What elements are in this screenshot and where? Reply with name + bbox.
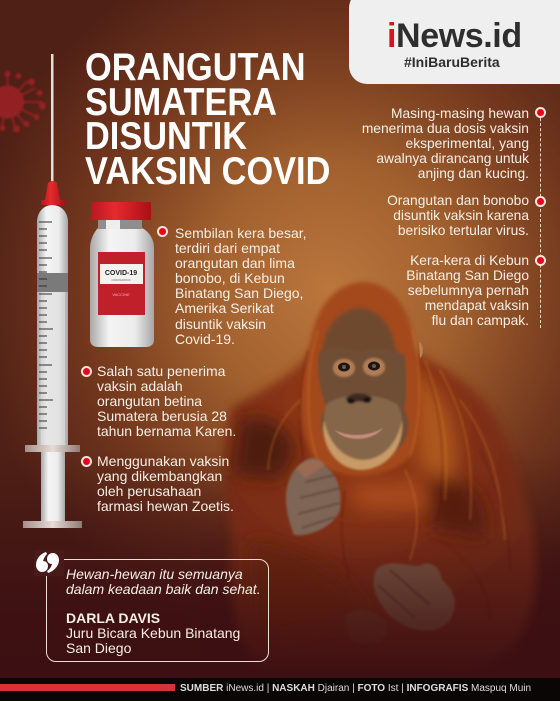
bullet marker 2 — [81, 366, 92, 377]
text: nine apes: Covid-19. — [175, 331, 235, 347]
text: risk: disuntik vaksin karena — [393, 208, 529, 223]
text: nine apes — [175, 225, 307, 347]
speaker: Juru Bicara Kebun Binatang — [66, 625, 240, 641]
text: flu: Binatang San Diego — [406, 268, 529, 283]
quote box — [46, 559, 269, 662]
tagline: #IniBaruBerita — [404, 54, 500, 70]
shaded fur masses — [232, 370, 486, 640]
text: Karen: Sumatera berusia 28 — [97, 408, 227, 424]
bullet marker 4 — [535, 107, 546, 118]
text: risk: Orangutan dan bonobo — [387, 193, 529, 208]
bullet marker 3 — [81, 456, 92, 467]
text: Zoetis: farmasi hewan Zoetis. — [97, 498, 234, 514]
text: two doses — [362, 106, 529, 181]
text: two doses: awalnya dirancang untuk — [376, 151, 529, 166]
face — [318, 348, 408, 470]
white label — [100, 264, 143, 284]
bullet group: left text — [81, 225, 307, 514]
bottom fade — [200, 530, 560, 680]
label text: VACCINE — [112, 292, 130, 297]
barrel — [37, 205, 68, 445]
mouth — [335, 428, 383, 439]
label text: CORONAVIRUS — [111, 278, 131, 282]
head hair — [301, 282, 422, 476]
text: nine apes: disuntik vaksin — [175, 316, 266, 332]
ear — [419, 342, 423, 358]
red cap — [91, 202, 151, 220]
bullet marker 5 — [535, 196, 546, 207]
upper hand — [286, 458, 340, 535]
orangutan illustration — [222, 280, 538, 652]
lower hand — [345, 563, 455, 644]
red hub — [41, 181, 65, 205]
speaker — [66, 610, 240, 656]
syringe — [23, 54, 82, 528]
red stripe — [0, 684, 175, 691]
bullet group: right text — [362, 106, 546, 328]
text: nine apes: Binatang San Diego, — [175, 285, 303, 301]
text: nine apes: Amerika Serikat — [175, 300, 274, 316]
flange — [25, 445, 80, 452]
text: two doses: Masing-masing hewan — [391, 106, 529, 121]
text: two doses: anjing dan kucing. — [418, 166, 529, 181]
footer bar — [0, 678, 560, 701]
body fur — [226, 345, 536, 670]
quote text — [66, 566, 261, 597]
vial glass — [90, 218, 154, 347]
quote text: Hewan-hewan itu semuanya — [66, 566, 243, 582]
text: flu: Kera-kera di Kebun — [410, 253, 529, 268]
quote text: dalam keadaan baik dan sehat. — [66, 581, 261, 597]
plunger rubber — [37, 273, 68, 292]
text: Karen — [97, 363, 236, 439]
text: nine apes: bonobo, di Kebun — [175, 270, 285, 286]
dashed line — [540, 108, 541, 328]
text: nine apes: Sembilan kera besar, — [175, 225, 307, 241]
text: nine apes: terdiri dari empat — [175, 240, 280, 256]
icon: quote mark — [34, 552, 64, 576]
text: flu: sebelumnya pernah — [408, 283, 529, 298]
icon: virus — [0, 70, 46, 134]
speaker: DARLA DAVIS — [66, 610, 160, 626]
text: Zoetis: Menggunakan vaksin — [97, 453, 229, 469]
needle — [51, 54, 54, 184]
label text — [105, 270, 137, 297]
text: Karen: vaksin adalah — [97, 378, 183, 394]
thumb rest — [23, 521, 82, 528]
speaker: San Diego — [66, 640, 131, 656]
text: Zoetis: oleh perusahaan — [97, 483, 201, 499]
neck — [98, 219, 142, 229]
text: risk — [387, 193, 530, 238]
text: Zoetis — [97, 453, 234, 514]
text: Karen: orangutan betina — [97, 393, 202, 409]
title — [85, 46, 330, 193]
title: VAKSIN COVID — [85, 150, 330, 193]
text: two doses: menerima dua dosis vaksin — [362, 121, 529, 136]
text: Karen: Salah satu penerima — [97, 363, 225, 379]
title: DISUNTIK — [85, 115, 247, 158]
vaccine vial — [90, 202, 154, 347]
scale ticks — [39, 222, 53, 428]
label text: COVID-19 — [105, 270, 137, 277]
title: SUMATERA — [85, 81, 277, 124]
plunger rod — [41, 451, 65, 521]
logo: iNews.id: iNews.id — [387, 17, 522, 55]
text: flu: flu dan campak. — [432, 313, 529, 328]
bullet marker 6 — [535, 255, 546, 266]
text: flu — [406, 253, 529, 328]
logo panel — [349, 0, 560, 84]
nose — [346, 394, 372, 404]
fur strands — [268, 330, 510, 620]
text: risk: berisiko tertular virus. — [398, 223, 529, 238]
credits: SUMBER iNews.id | NASKAH Djairan | FOTO Ist | INFOGRAFIS Maspuq Muin — [180, 683, 531, 694]
title: ORANGUTAN — [85, 46, 306, 89]
forehead — [322, 308, 396, 358]
text: Zoetis: yang dikembangkan — [97, 468, 222, 484]
text: Karen: tahun bernama Karen. — [97, 423, 236, 439]
text: nine apes: orangutan dan lima — [175, 255, 295, 271]
text: two doses: eksperimental, yang — [406, 136, 529, 151]
eyes — [338, 362, 380, 372]
bullet marker 1 — [157, 226, 168, 237]
text: flu: mendapat vaksin — [425, 298, 529, 313]
red label — [98, 252, 145, 315]
